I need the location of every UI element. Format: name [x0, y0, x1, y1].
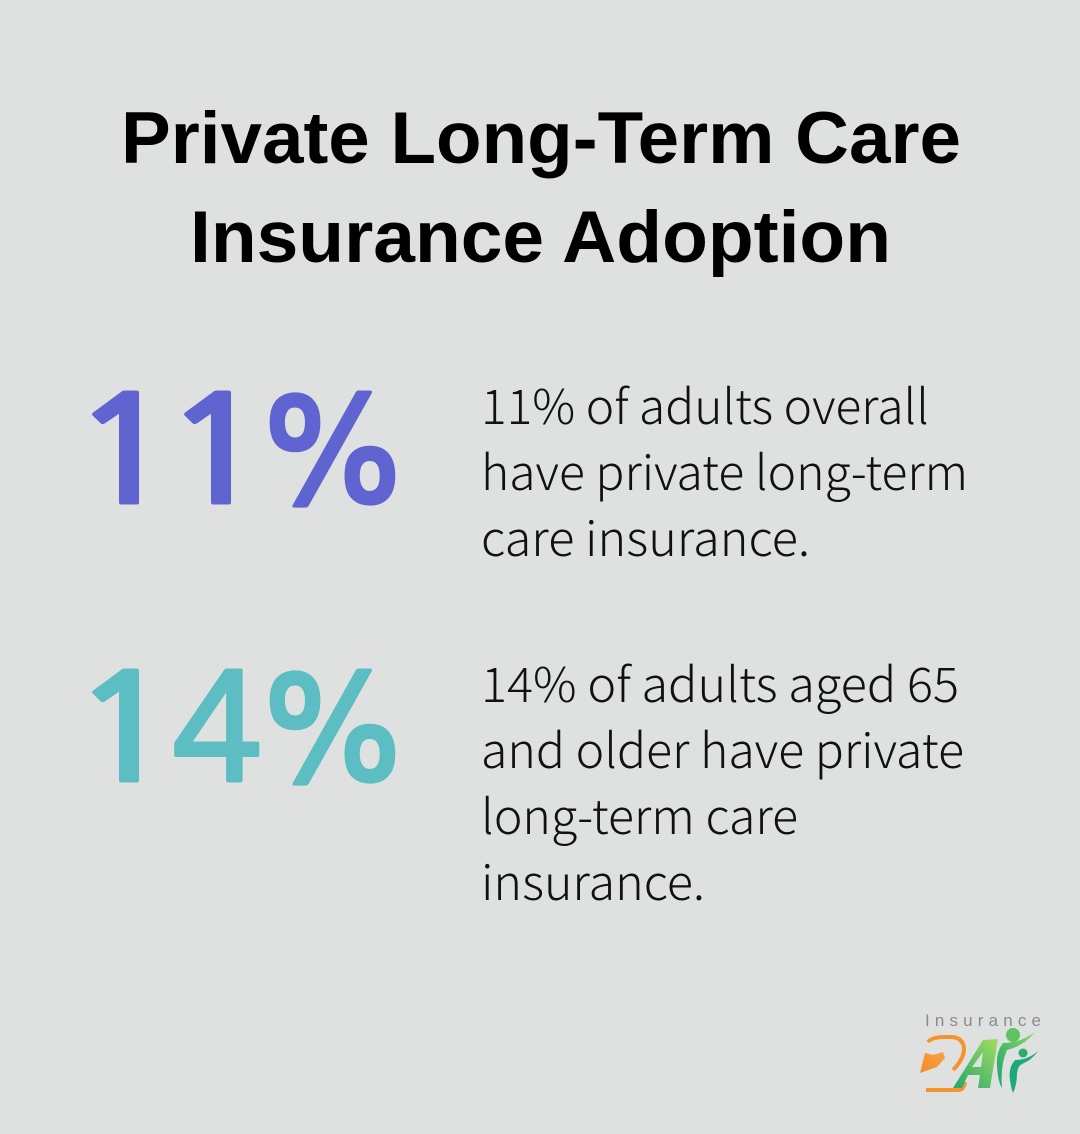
- panel: 11% statistic: [68, 368, 968, 570]
- logo icon: orange 2: [926, 1037, 965, 1090]
- logo icon: small figure: [1010, 1048, 1038, 1093]
- title: Private Long-Term Care: [121, 98, 961, 179]
- title: [121, 98, 961, 278]
- logo icon: green A: [953, 1039, 998, 1088]
- text block: 11% description: 11% of adults overall: [481, 368, 929, 438]
- text block: 11% description: care insurance.: [481, 500, 810, 570]
- big number: 14%: 1: [68, 657, 182, 805]
- big number: 11%: %: [253, 383, 412, 527]
- text block: 14% description: and older have private: [481, 712, 964, 782]
- big number: 11%: [68, 379, 412, 527]
- big number: 14%: 4: [170, 656, 264, 805]
- big number: 11%: 1: [68, 379, 182, 527]
- text block: 14% description: long-term care: [481, 778, 798, 848]
- text block: 14% description: insurance.: [481, 844, 705, 914]
- panel: 14% statistic: [68, 646, 964, 914]
- text block: 14% description: [481, 646, 964, 914]
- logo icon: orange heart: [920, 1052, 945, 1073]
- big number: 11%: 1: [160, 379, 274, 527]
- text block: 14% description: 14% of adults aged 65: [481, 646, 959, 716]
- title: Insurance Adoption: [190, 197, 891, 278]
- big number: 14%: %: [253, 661, 412, 805]
- text block: 11% description: have private long-term: [481, 434, 968, 504]
- logo wordmark: Insurance: [925, 1011, 1041, 1030]
- logo: Insurance 2Aii: [920, 1011, 1041, 1093]
- text block: 11% description: [481, 368, 968, 570]
- big number: 14%: [68, 656, 412, 805]
- logo icon: large figure: [997, 1028, 1035, 1088]
